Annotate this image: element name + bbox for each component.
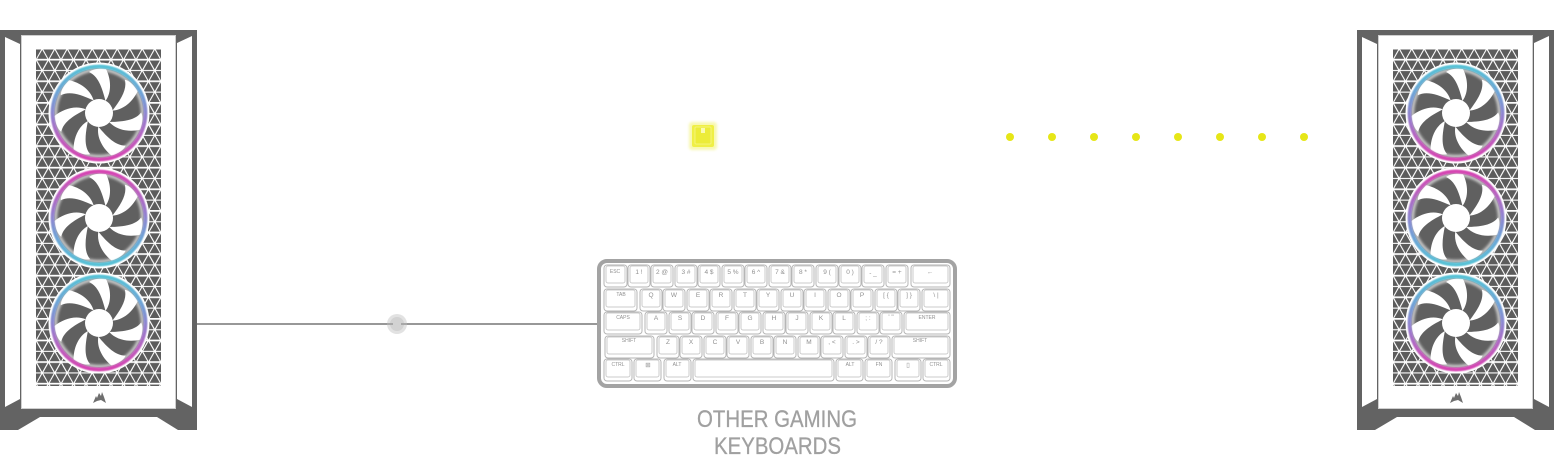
keyboard row 1: number keys: = + bbox=[892, 269, 902, 276]
left PC case with three RGB fans bbox=[0, 30, 197, 430]
keyboard row 4: shift row keys: . > bbox=[852, 339, 860, 346]
keyboard row 1: number keys: 0 ) bbox=[846, 269, 854, 276]
keyboard row 4: shift row keys: V bbox=[736, 339, 741, 346]
caption: other gaming keyboards: OTHER GAMING bbox=[697, 406, 857, 433]
keyboard row 5: bottom row keys: CTRL bbox=[611, 362, 625, 368]
keyboard row 2: QWERTY keys: ] } bbox=[906, 292, 913, 299]
keyboard row 3: home row keys: G bbox=[747, 315, 753, 322]
keyboard row 2: QWERTY keys: U bbox=[790, 292, 795, 299]
keyboard row 4: shift row keys: , < bbox=[828, 339, 836, 346]
keyboard row 2: QWERTY keys: W bbox=[671, 292, 678, 299]
keyboard row 5: bottom row keys: ⊞ bbox=[645, 362, 651, 369]
keyboard row 2: QWERTY keys: Q bbox=[648, 292, 654, 299]
keyboard row 2: QWERTY keys: Y bbox=[766, 292, 771, 299]
keyboard row 1: number keys: 6 ^ bbox=[752, 269, 761, 276]
keyboard row 1: number keys bbox=[604, 265, 950, 287]
keyboard row 3: home row keys: F bbox=[725, 315, 729, 322]
keyboard row 4: shift row keys: X bbox=[689, 339, 694, 346]
moving signal node on the cable bbox=[387, 314, 407, 334]
keyboard row 1: number keys: ← bbox=[927, 269, 933, 276]
keyboard row 1: number keys: 2 @ bbox=[656, 269, 668, 276]
keyboard row 5: bottom row keys bbox=[604, 359, 950, 381]
keyboard row 3: home row keys: H bbox=[772, 315, 777, 322]
keyboard row 4: shift row keys: B bbox=[760, 339, 764, 346]
keyboard row 4: shift row keys: N bbox=[783, 339, 788, 346]
keyboard row 5: bottom row keys: ALT bbox=[846, 362, 854, 368]
keyboard row 2: QWERTY keys: T bbox=[743, 292, 747, 299]
keyboard row 4: shift row keys: C bbox=[713, 339, 718, 346]
keyboard row 3: home row keys: S bbox=[678, 315, 683, 322]
keyboard row 2: QWERTY keys: E bbox=[696, 292, 701, 299]
keyboard row 4: shift row keys: SHIFT bbox=[913, 338, 927, 344]
keyboard row 2: QWERTY keys: \ | bbox=[933, 292, 939, 299]
keyboard row 1: number keys: 5 % bbox=[727, 269, 739, 276]
keyboard row 2: QWERTY keys: TAB bbox=[616, 292, 626, 298]
keyboard row 5: bottom row keys: ▯ bbox=[906, 362, 910, 369]
keyboard row 2: QWERTY keys: [ { bbox=[883, 292, 890, 299]
keyboard row 2: QWERTY keys: P bbox=[860, 292, 864, 299]
keyboard row 2: QWERTY keys: I bbox=[814, 292, 816, 299]
keyboard row 1: number keys: 4 $ bbox=[704, 269, 714, 276]
keyboard bbox=[599, 261, 955, 386]
keyboard row 1: number keys: 7 & bbox=[775, 269, 786, 276]
keyboard row 5: bottom row keys: CTRL bbox=[929, 362, 943, 368]
caption: other gaming keyboards: KEYBOARDS bbox=[714, 433, 841, 460]
keyboard row 1: number keys: 9 ( bbox=[823, 269, 832, 276]
keyboard row 1: number keys: ESC bbox=[610, 269, 621, 275]
keyboard row 5: bottom row keys: FN bbox=[876, 362, 883, 368]
keyboard row 5: bottom row keys: ALT bbox=[673, 362, 681, 368]
keyboard row 4: shift row keys: SHIFT bbox=[622, 338, 636, 344]
keyboard row 3: home row keys: ' " bbox=[888, 314, 894, 321]
keyboard row 3: home row keys: A bbox=[654, 315, 659, 322]
keyboard row 3: home row keys: K bbox=[819, 315, 824, 322]
keyboard row 2: QWERTY keys: O bbox=[836, 292, 842, 299]
right PC case with three RGB fans bbox=[1357, 30, 1554, 430]
keyboard row 3: home row keys: CAPS bbox=[616, 315, 630, 321]
keyboard row 3: home row keys: L bbox=[842, 315, 846, 322]
keyboard row 1: number keys: 8 * bbox=[799, 269, 807, 276]
yellow dotted signal line bbox=[1006, 133, 1308, 141]
keyboard row 4: shift row keys: M bbox=[806, 339, 812, 346]
caption: other gaming keyboards bbox=[697, 406, 857, 460]
keyboard row 2: QWERTY keys bbox=[604, 289, 950, 311]
keyboard row 4: shift row keys: Z bbox=[666, 339, 670, 346]
yellow pressed key icon bbox=[689, 122, 717, 150]
keyboard row 3: home row keys bbox=[604, 312, 950, 334]
keyboard row 1: number keys: 3 # bbox=[681, 269, 691, 276]
keyboard row 3: home row keys: D bbox=[701, 315, 706, 322]
keyboard row 3: home row keys: ; : bbox=[865, 315, 871, 322]
keyboard row 3: home row keys: J bbox=[795, 315, 799, 322]
connector cable from left PC to keyboard bbox=[197, 314, 597, 334]
keyboard row 3: home row keys: ENTER bbox=[919, 315, 936, 321]
keyboard row 2: QWERTY keys: R bbox=[719, 292, 724, 299]
keyboard row 1: number keys: - _ bbox=[869, 270, 877, 277]
keyboard row 4: shift row keys: / ? bbox=[875, 339, 883, 346]
keyboard row 1: number keys: 1 ! bbox=[635, 269, 643, 276]
keyboard row 4: shift row keys bbox=[605, 336, 950, 358]
